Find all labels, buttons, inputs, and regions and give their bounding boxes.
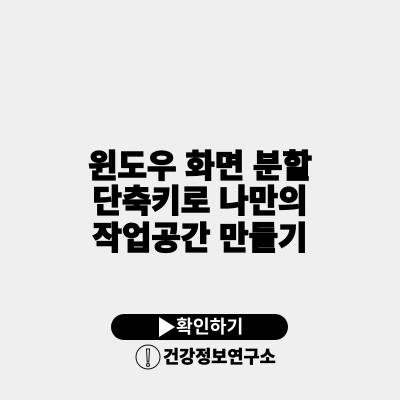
title: 윈도우 화면 분할: [88, 148, 312, 184]
title: 단축키로 나만의: [92, 183, 307, 219]
footer logo: [136, 344, 276, 370]
button: 확인하기: 확인하기: [176, 316, 243, 337]
icon: exclamation circle: [136, 344, 160, 370]
button: 확인하기: [111, 314, 288, 340]
title: 작업공간 만들기: [92, 220, 307, 256]
brand name: 건강정보연구소: [163, 347, 276, 367]
title: [88, 148, 312, 256]
